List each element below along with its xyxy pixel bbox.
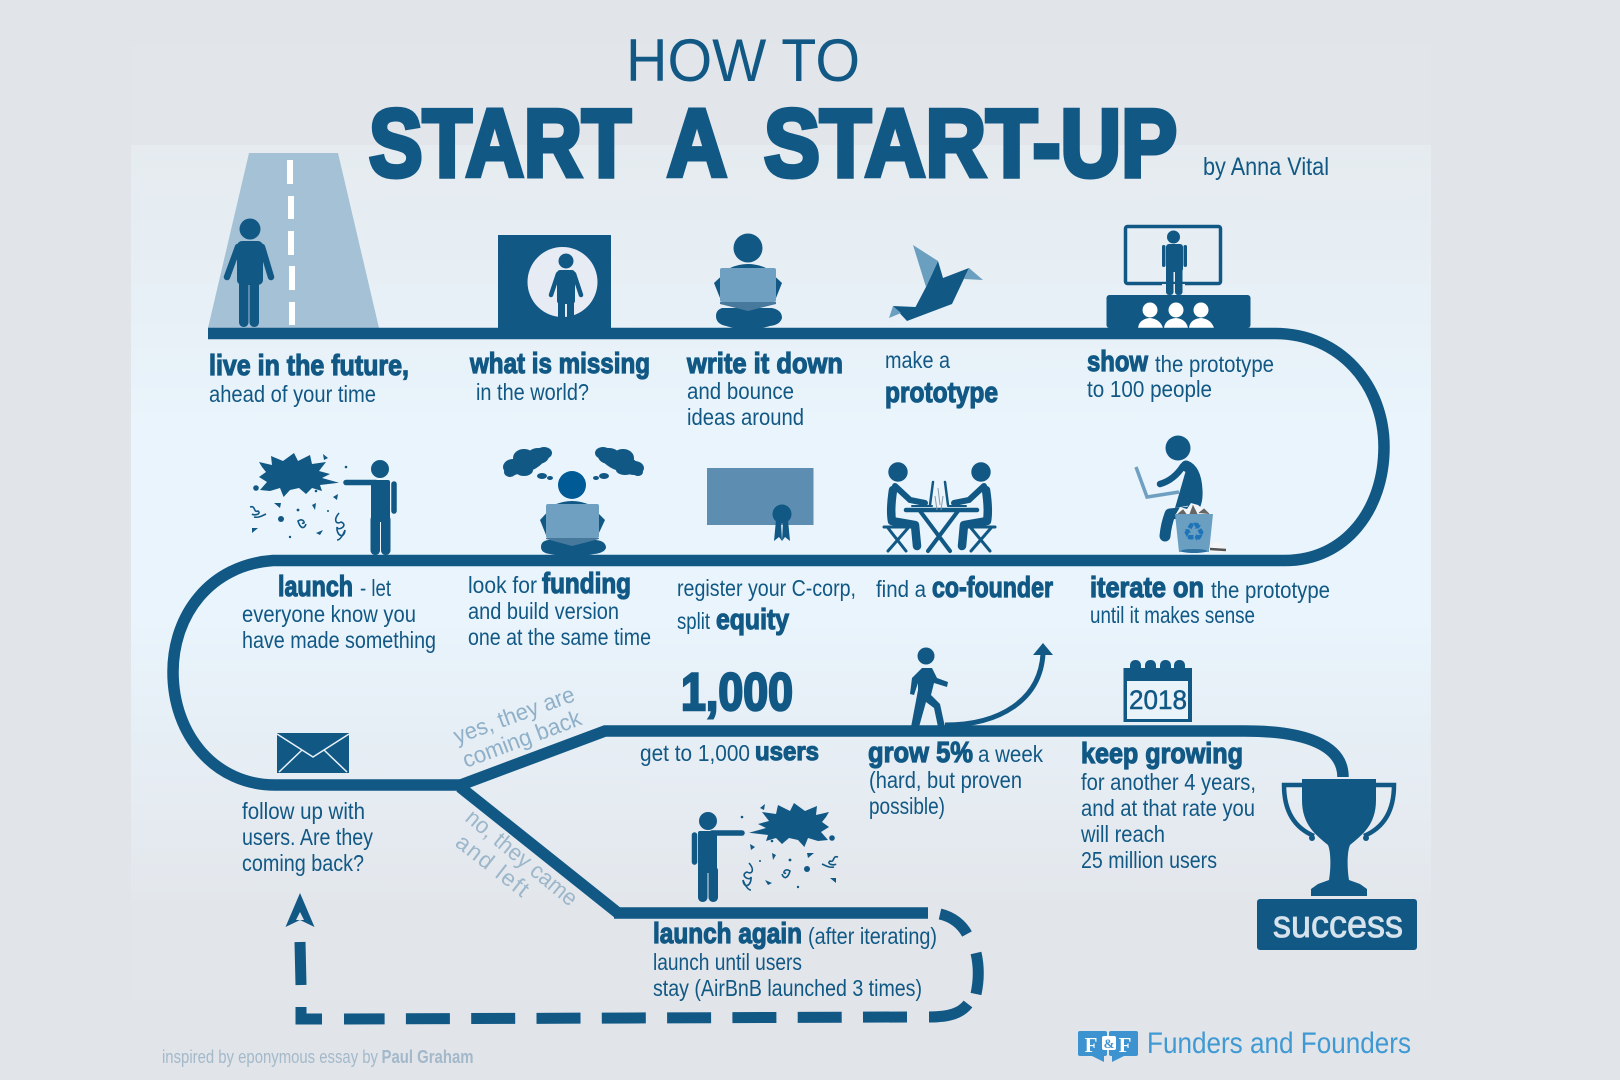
text: register C-corp xyxy=(677,575,856,636)
text: keep growing: for another 4 years, xyxy=(1081,769,1256,795)
text: grow 5%: possible) xyxy=(869,793,945,819)
label: yes, they are coming back: yes, they are xyxy=(450,681,578,749)
title: START-UP xyxy=(764,90,1177,197)
icon: person writing on laptop xyxy=(714,234,782,332)
text: launch: - let xyxy=(360,575,391,601)
text: keep growing: keep growing xyxy=(1081,738,1243,770)
icon: walking person with growth arrow xyxy=(910,643,1053,727)
text: launch xyxy=(242,571,436,653)
text: write it down: ideas around xyxy=(687,404,804,430)
text: live in the future: live in the future, xyxy=(209,350,409,382)
logo: Funders and Founders: & xyxy=(1104,1036,1115,1051)
text: keep growing: will reach xyxy=(1080,821,1165,847)
text: show the prototype: the prototype xyxy=(1155,351,1274,377)
icon: thinking person with laptop xyxy=(503,447,644,558)
icon: road with person xyxy=(208,153,379,328)
text: find a co-founder: find a xyxy=(876,576,926,602)
text: follow up: users. Are they xyxy=(242,824,373,850)
icon: person iterating on laptop at recycle bin xyxy=(1136,436,1227,553)
text: make a prototype: prototype xyxy=(885,377,998,409)
title xyxy=(369,27,1177,197)
text: find a co-founder: co-founder xyxy=(932,572,1053,604)
title: A xyxy=(667,90,727,197)
credit: inspired by Paul Graham: inspired by eponymous essay by xyxy=(162,1047,378,1067)
text: keep growing: and at that rate you xyxy=(1081,795,1255,821)
text: grow 5%: grow 5% xyxy=(868,737,973,769)
text: iterate on the prototype: until it makes sense xyxy=(1090,602,1255,628)
number: 1,000: 1,000 xyxy=(681,663,793,722)
label: no, they came and left: no, they came xyxy=(461,804,583,911)
text: launch again: (after iterating) xyxy=(808,923,937,949)
text: launch again: launch again xyxy=(653,918,802,950)
badge: success: success xyxy=(1273,904,1403,946)
text: what is missing xyxy=(469,348,650,405)
icon: two co-founders at a table xyxy=(884,462,995,551)
text: get to 1,000 users xyxy=(640,736,819,766)
text: iterate on the prototype xyxy=(1090,572,1330,628)
dashed return path with arrow xyxy=(286,893,978,1019)
text: look for funding: look for xyxy=(468,572,537,598)
text: register C-corp: register your C-corp, xyxy=(677,575,856,601)
text: grow 5% xyxy=(868,737,1043,819)
text: grow 5%: a week xyxy=(978,741,1043,767)
text: make a prototype xyxy=(885,347,998,409)
title: HOW TO xyxy=(626,27,860,94)
icon: launch again person with burst xyxy=(694,803,838,902)
text: launch again: launch until users xyxy=(653,949,802,975)
icon: trophy xyxy=(1284,779,1394,896)
logo: Funders and Founders: Funders and Founders xyxy=(1147,1027,1411,1060)
text: what is missing: in the world? xyxy=(476,379,589,405)
icon: presenter on stage with audience xyxy=(1106,226,1250,328)
logo: Funders and Founders: F xyxy=(1119,1033,1131,1057)
text: follow up: coming back? xyxy=(242,850,364,876)
text: launch again: stay (AirBnB launched 3 times) xyxy=(653,975,922,1001)
label: no, they came and left: and left xyxy=(451,828,535,902)
text: write it down: write it down xyxy=(686,348,843,380)
credit: inspired by Paul Graham: Paul Graham xyxy=(382,1047,474,1067)
logo: Funders and Founders xyxy=(1078,1027,1411,1062)
icon: person iterating on laptop at recycle bin: ♻ xyxy=(1182,518,1206,548)
text: get to 1,000 users: users xyxy=(755,736,819,766)
text: keep growing: 25 million users xyxy=(1081,847,1217,873)
text: look for funding: funding xyxy=(542,568,631,600)
text: launch again xyxy=(653,918,937,1001)
text: show the prototype: show xyxy=(1087,346,1148,378)
text: look for funding xyxy=(468,568,651,650)
text: write it down: and bounce xyxy=(687,378,794,404)
text: make a prototype: make a xyxy=(885,347,950,373)
text: live in the future xyxy=(209,350,409,407)
background panel xyxy=(131,145,1431,900)
icon: mirror box with person xyxy=(498,235,611,330)
text: iterate on the prototype: iterate on xyxy=(1090,572,1204,604)
text: get to 1,000 users: get to 1,000 xyxy=(640,740,750,766)
icon: launch person with burst xyxy=(250,453,394,555)
icon: calendar 2018: 2018 xyxy=(1129,685,1187,715)
label: yes, they are coming back: coming back xyxy=(459,704,585,773)
icon: calendar 2018 xyxy=(1124,660,1192,722)
text: launch: everyone know you xyxy=(242,601,416,627)
text: find a co-founder xyxy=(876,572,1053,604)
logo: Funders and Founders: F xyxy=(1085,1033,1097,1057)
text: write it down xyxy=(686,348,843,430)
text: what is missing: what is missing xyxy=(469,348,650,380)
text: launch: launch xyxy=(278,571,353,603)
text: live in the future: ahead of your time xyxy=(209,381,376,407)
text: follow up xyxy=(242,798,373,876)
text: register C-corp: split xyxy=(677,608,710,634)
text: grow 5%: (hard, but proven xyxy=(869,767,1022,793)
text: follow up: follow up with xyxy=(242,798,365,824)
text: look for funding: and build version xyxy=(468,598,619,624)
text: keep growing xyxy=(1080,738,1256,873)
text: register C-corp: equity xyxy=(716,604,789,636)
byline: by Anna Vital xyxy=(1203,153,1329,181)
text: show the prototype: to 100 people xyxy=(1087,376,1212,402)
text: show the prototype xyxy=(1087,346,1274,402)
text: look for funding: one at the same time xyxy=(468,624,651,650)
text: launch: have made something xyxy=(242,627,436,653)
main road path xyxy=(173,334,1384,913)
icon: origami bird prototype xyxy=(889,245,983,321)
text: iterate on the prototype: the prototype xyxy=(1211,577,1330,603)
icon: certificate with seal xyxy=(707,468,814,541)
title: START xyxy=(369,90,631,197)
icon: envelope xyxy=(277,733,349,773)
